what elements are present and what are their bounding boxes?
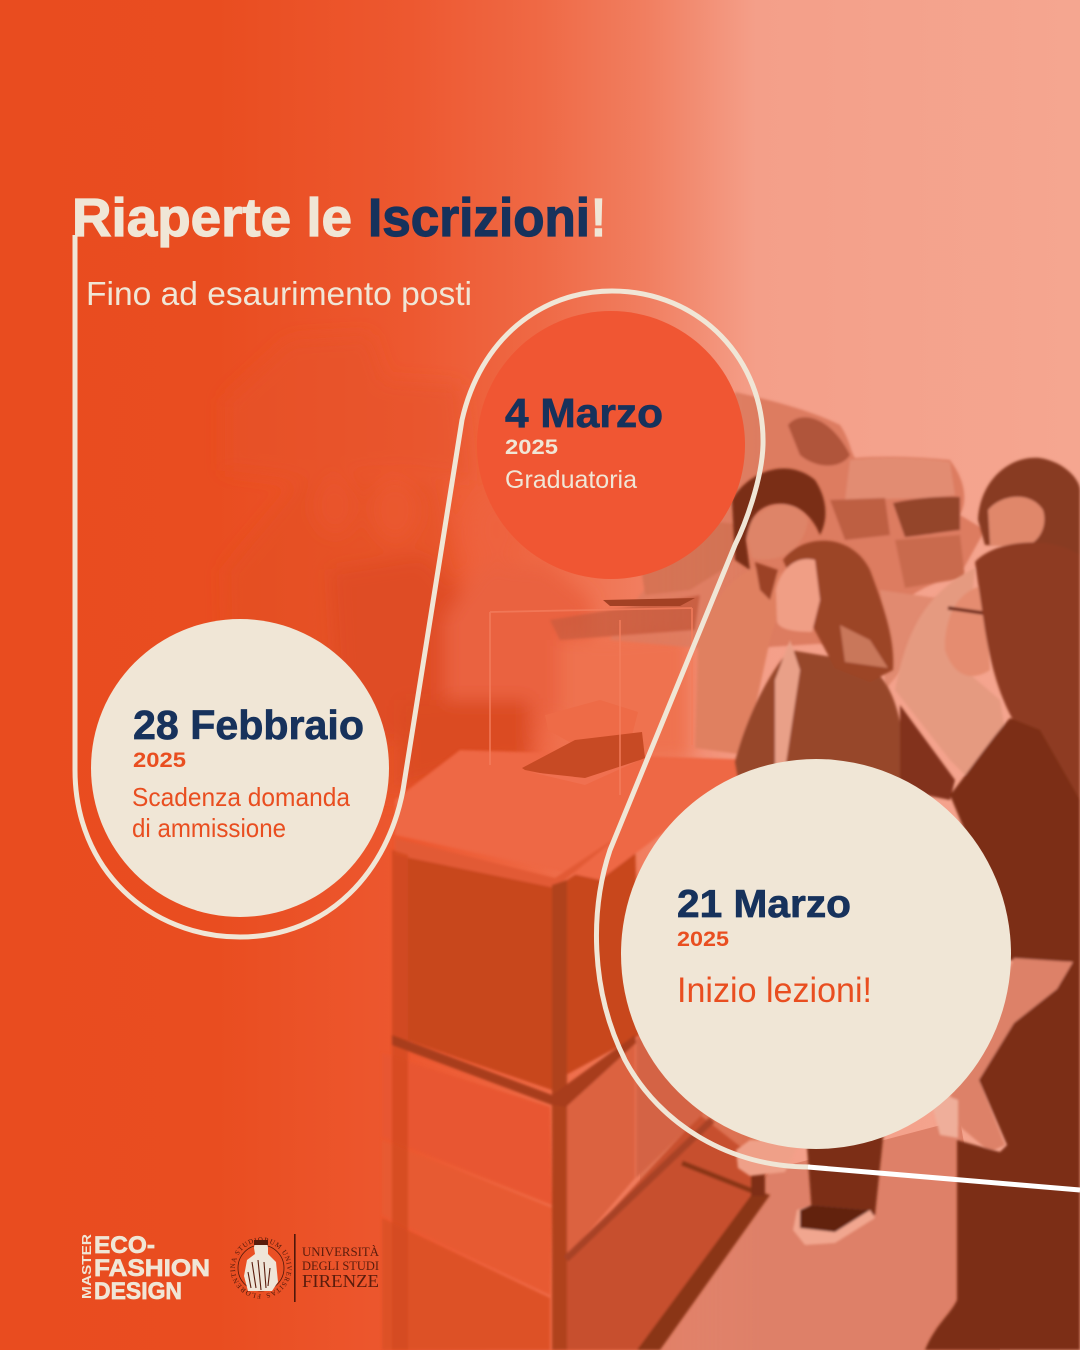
line end: white stroke to right edge [808,1167,1080,1190]
faded group on the left [225,335,690,800]
logo: Master Eco-Fashion Design: MASTER [79,1233,94,1299]
floor [640,1120,1000,1350]
logo: university name: DEGLI STUDI [302,1259,379,1273]
bag pile [550,392,985,690]
logo: Master Eco-Fashion Design: ECO- [94,1232,155,1259]
logo: university name: FIRENZE [302,1271,379,1291]
milestone: 28 Febbraio [91,619,389,917]
title: ! [591,188,606,248]
scale on table [522,700,645,785]
table and shelf [382,750,770,1350]
person in dark shirt [925,718,1080,1350]
year: 2025 [133,749,186,772]
year: 2025 [677,928,729,951]
date: 21 Marzo [677,883,851,926]
year: 2025 [505,436,558,459]
tools on shelf [603,598,695,606]
connecting line [75,235,810,1167]
title [72,188,606,248]
description: di ammissione [132,813,286,843]
description: Inizio lezioni! [677,971,872,1010]
logo: university name [302,1245,379,1291]
boy with sweater [695,469,825,755]
curly-haired woman [978,458,1080,560]
glass box [490,608,692,795]
woman with glasses and light top [895,568,1005,780]
logo: Università degli Studi di Firenze seal: FLORENTINA STUDIORUM UNIVERSITAS [230,1237,292,1299]
milestone: 21 Marzo [621,759,1011,1149]
background photo: students and table, duotone [328,392,1000,1350]
girl with denim jacket [735,541,955,800]
logo: Master Eco-Fashion Design: FASHION [94,1255,210,1282]
logo: Master Eco-Fashion Design: DESIGN [94,1278,182,1305]
trousers and shoes [736,1095,958,1245]
long dark hair [975,542,1080,810]
title: Iscrizioni [368,188,590,248]
milestone: 4 Marzo [477,311,745,579]
description: Scadenza domanda [132,782,350,812]
date: 4 Marzo [505,390,663,436]
logo: university name: UNIVERSITÀ [302,1245,379,1259]
subtitle: Fino ad esaurimento posti [86,275,472,312]
logo: Master Eco-Fashion Design [79,1232,210,1305]
logo divider [294,1234,296,1302]
description: Graduatoria [505,466,637,494]
title: Riaperte le [72,188,352,248]
date: 28 Febbraio [133,702,364,748]
